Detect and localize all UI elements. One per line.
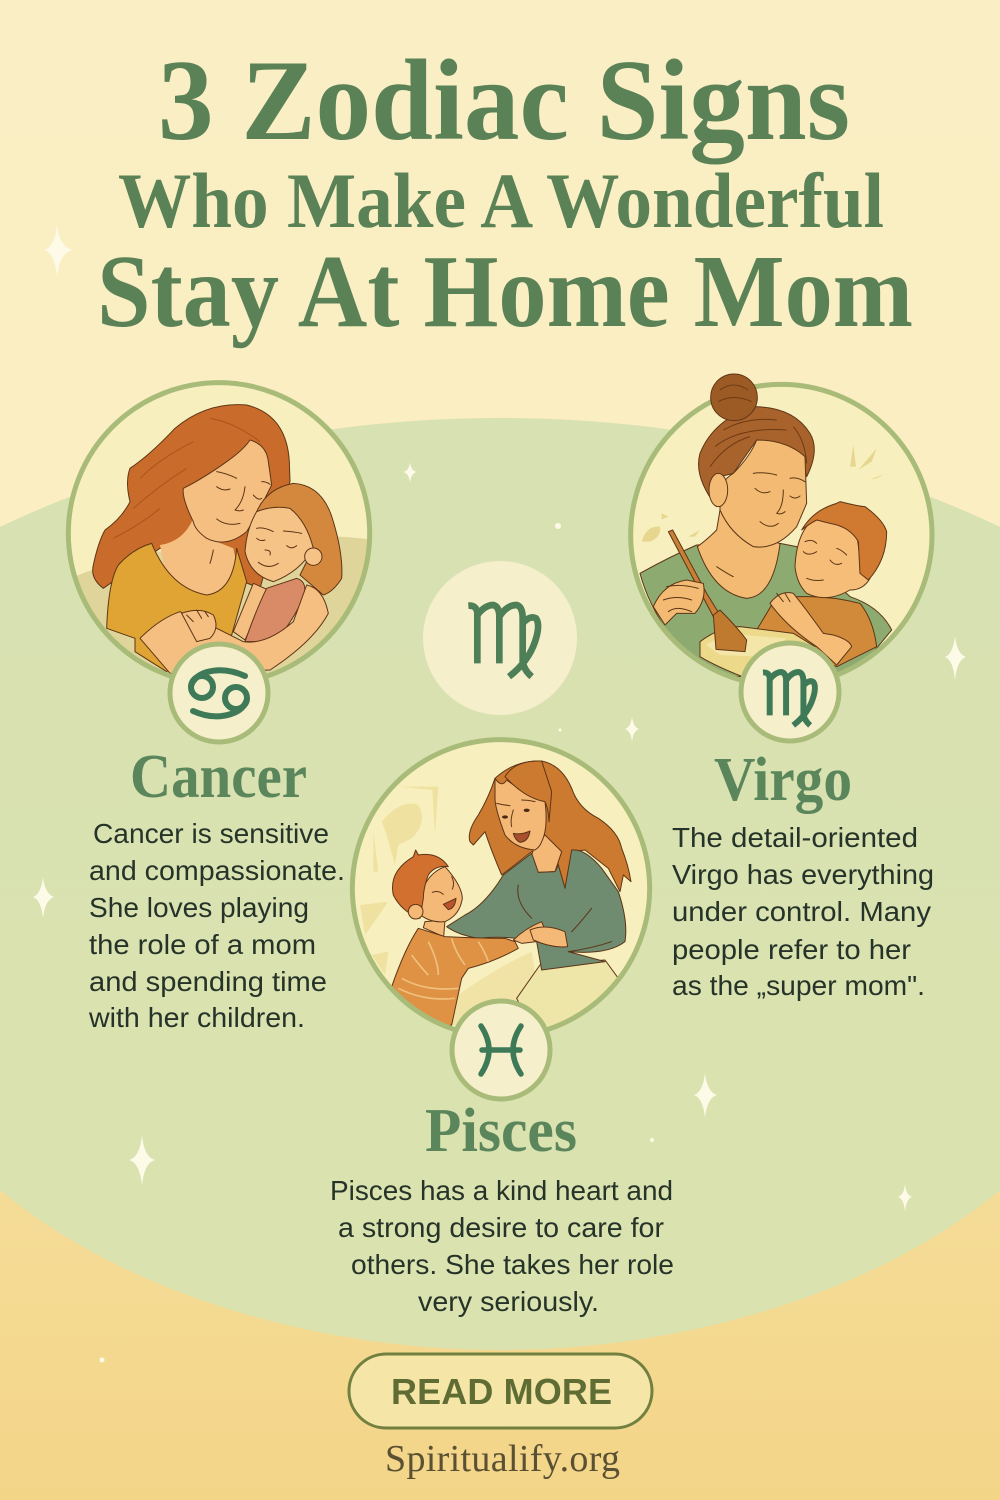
text: pisces description — [330, 1175, 674, 1317]
title line 2: Who Make A Wonderful — [118, 157, 884, 244]
illustration: mother dancing with son — [352, 740, 650, 1037]
text: cancer description — [88, 818, 345, 1033]
icon: pisces badge — [452, 1001, 550, 1099]
button: read more: READ MORE — [391, 1371, 612, 1412]
text: pisces description: others. She takes her role — [351, 1249, 674, 1280]
panel: virgo — [631, 374, 934, 1001]
title line 3: Stay At Home Mom — [97, 234, 913, 349]
heading: cancer: Cancer — [130, 743, 307, 811]
text: cancer description: Cancer is sensitive — [93, 818, 329, 849]
text: virgo description: as the „super mom". — [672, 970, 925, 1001]
text: cancer description: with her children. — [88, 1002, 305, 1033]
button: read more — [349, 1354, 652, 1428]
text: cancer description: She loves playing — [89, 892, 309, 923]
icon: virgo badge — [741, 643, 839, 741]
illustration: mother hugging daughter — [68, 383, 373, 684]
panel: pisces — [330, 740, 674, 1317]
heading: virgo: Virgo — [714, 746, 852, 814]
title line 1: 3 Zodiac Signs — [158, 37, 850, 165]
text: virgo description: under control. Many — [672, 896, 931, 927]
panel: cancer — [68, 383, 373, 1033]
text: virgo description: The detail-oriented — [672, 822, 918, 853]
footer: website: Spiritualify.org — [385, 1438, 620, 1480]
text: virgo description: people refer to her — [672, 934, 911, 965]
title — [97, 37, 913, 349]
sparkles — [33, 224, 966, 1362]
text: pisces description: Pisces has a kind heart and — [330, 1175, 673, 1206]
icon: central virgo medallion — [423, 561, 577, 715]
text: pisces description: very seriously. — [418, 1286, 599, 1317]
icon: cancer badge — [170, 644, 268, 742]
illustration: mother cooking with son — [631, 374, 932, 686]
text: cancer description: and compassionate. — [89, 855, 345, 886]
text: virgo description — [672, 822, 934, 1001]
heading: pisces: Pisces — [425, 1097, 577, 1165]
text: cancer description: and spending time — [89, 966, 327, 997]
text: cancer description: the role of a mom — [89, 929, 316, 960]
text: virgo description: Virgo has everything — [672, 859, 934, 890]
text: pisces description: a strong desire to care for — [338, 1212, 664, 1243]
